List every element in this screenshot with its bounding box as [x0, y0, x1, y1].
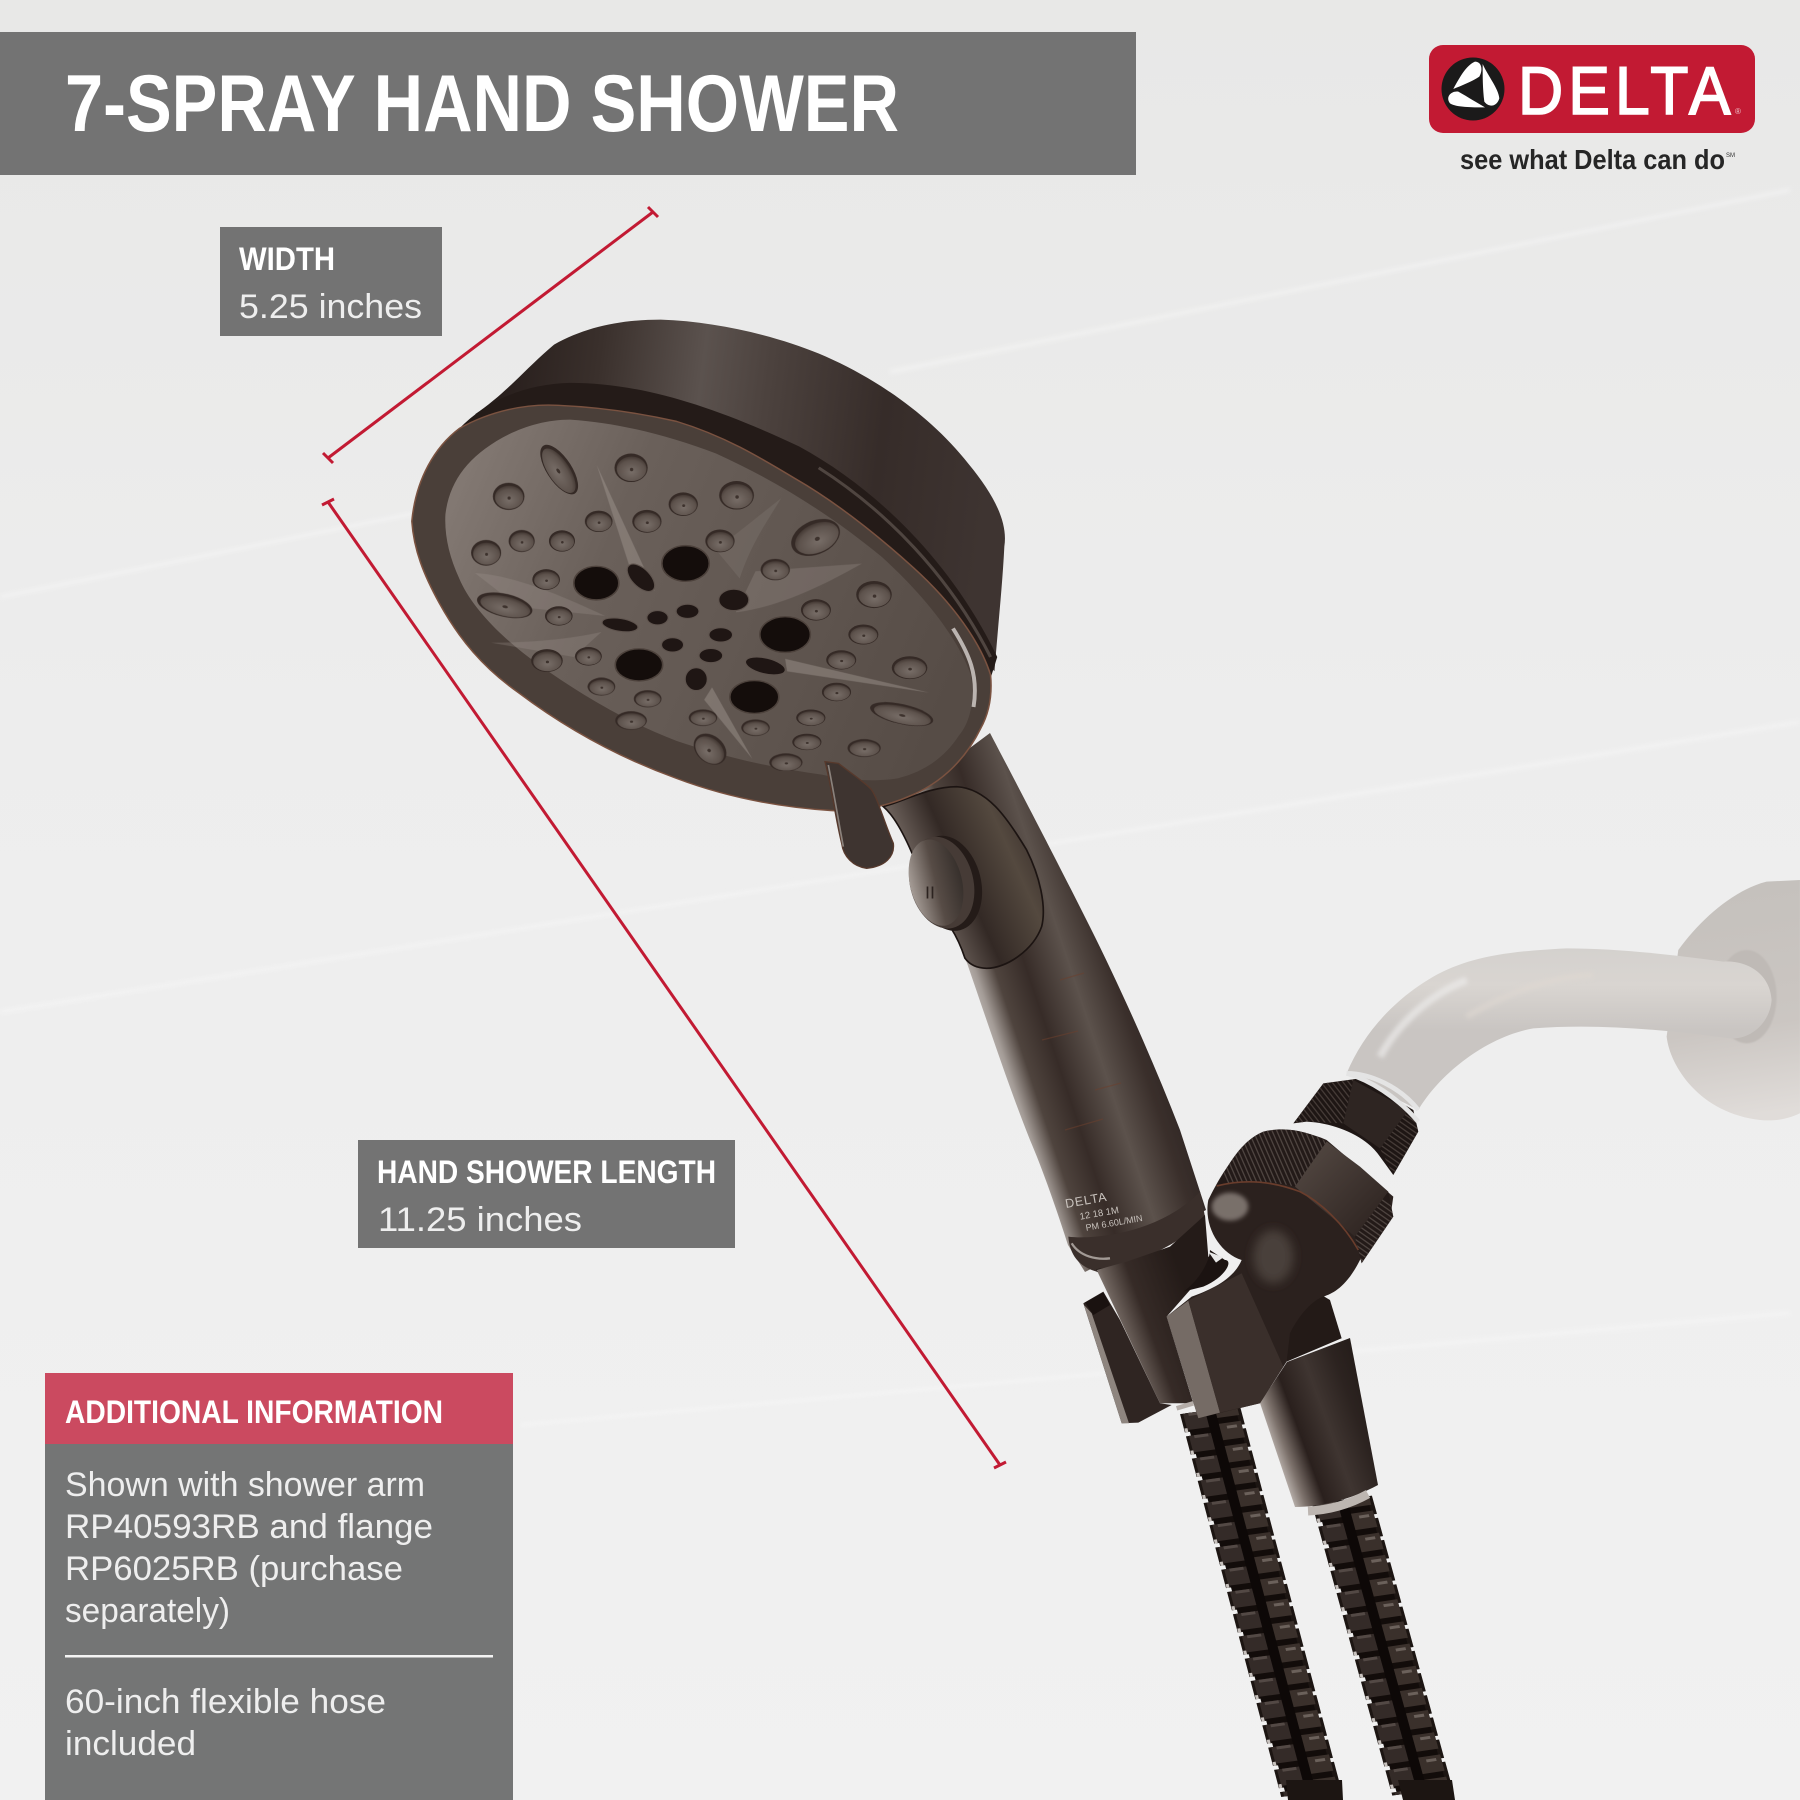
star ribs	[475, 465, 929, 759]
dimension line: width	[323, 207, 658, 463]
label: hand shower length	[358, 1140, 735, 1248]
hose bottom ends	[1286, 1780, 1455, 1800]
collar smooth band	[1295, 1142, 1388, 1237]
handle brushed streaks	[1042, 973, 1121, 1130]
handle collar	[1068, 1192, 1205, 1272]
face plate	[445, 420, 972, 780]
wall mount bracket	[1083, 1073, 1420, 1423]
teardrop and centre jets	[601, 560, 787, 691]
nozzles	[471, 440, 936, 771]
bracket body	[1167, 1130, 1393, 1418]
label: hand shower length: HAND SHOWER LENGTH	[377, 1154, 716, 1190]
label: width: 5.25 inches	[239, 288, 422, 326]
bracket neck	[1283, 1290, 1342, 1362]
spray button: II	[925, 882, 935, 902]
note: shower arm: separately)	[65, 1592, 230, 1630]
logo emblem	[1442, 58, 1504, 120]
seam band	[459, 383, 997, 678]
note: shower arm: RP40593RB and flange	[65, 1508, 433, 1546]
note: hose	[65, 1683, 386, 1763]
collar rust edge	[1217, 1182, 1358, 1250]
label: width	[220, 227, 442, 336]
collar right knurl	[1355, 1192, 1393, 1263]
spray lever	[825, 762, 894, 868]
handle grip	[900, 733, 1206, 1272]
wall flange	[1667, 880, 1800, 1120]
knurled collar	[1217, 1129, 1327, 1187]
service mark: SM	[1726, 153, 1735, 159]
spray button	[900, 829, 992, 938]
flange socket	[1717, 950, 1777, 1043]
rim	[412, 405, 991, 811]
note: shower arm: Shown with shower arm	[65, 1466, 425, 1504]
label: hand shower length: 11.25 inches	[378, 1201, 582, 1239]
rim edge highlight	[819, 468, 991, 657]
note: hose: 60-inch flexible hose	[65, 1683, 386, 1721]
hose to wall mount	[1314, 1497, 1439, 1795]
lower ferrule on hose	[1260, 1338, 1378, 1511]
clip opening	[1183, 1250, 1228, 1292]
note: hose: included	[65, 1725, 196, 1763]
hose to hand shower	[1182, 1408, 1328, 1797]
ball highlight	[1212, 1193, 1248, 1221]
label: width: WIDTH	[239, 241, 335, 277]
hoses	[1182, 1408, 1455, 1800]
handle stamp text: 12 18 1M	[1079, 1205, 1120, 1223]
hand shower body	[883, 733, 1206, 1272]
back cup	[475, 320, 1005, 671]
panel heading: ADDITIONAL INFORMATION	[65, 1394, 443, 1430]
note: shower arm: RP6025RB (purchase	[65, 1550, 403, 1588]
silver ring	[1308, 1494, 1368, 1511]
note: shower arm	[65, 1466, 433, 1630]
title bar: 7-SPRAY HAND SHOWER	[65, 59, 899, 149]
arm highlight	[1380, 980, 1467, 1057]
tagline: see what Delta can do	[1460, 144, 1725, 175]
logo wordmark: DELTA	[1518, 53, 1736, 129]
bracket arm front face	[1167, 1301, 1220, 1418]
panel body	[45, 1444, 513, 1800]
arm tube	[1347, 948, 1772, 1110]
dimension line: length	[322, 499, 1006, 1468]
panel heading	[45, 1373, 513, 1444]
registered mark: ®	[1735, 107, 1741, 116]
upper nut	[1293, 1078, 1418, 1175]
logo badge	[1429, 45, 1755, 133]
shower arm and flange (faded)	[1347, 880, 1800, 1120]
rim highlight	[953, 628, 975, 707]
handle stamp text: DELTA	[1064, 1190, 1108, 1211]
Delta logo	[1429, 45, 1755, 175]
handle cone	[1097, 1215, 1227, 1403]
handle stamp text	[1064, 1184, 1143, 1236]
handle stamp text: PM 6.60L/MIN	[1085, 1213, 1143, 1233]
button plate	[883, 787, 1043, 968]
silver ring under handle	[1177, 1403, 1193, 1408]
translucent ring	[1347, 1073, 1418, 1122]
hose clip	[1083, 1292, 1172, 1423]
shower head	[412, 320, 1005, 811]
large dark jets	[574, 546, 810, 713]
translucent collar	[1347, 1073, 1418, 1110]
panel: additional information	[45, 1373, 513, 1800]
title bar	[0, 32, 1136, 175]
